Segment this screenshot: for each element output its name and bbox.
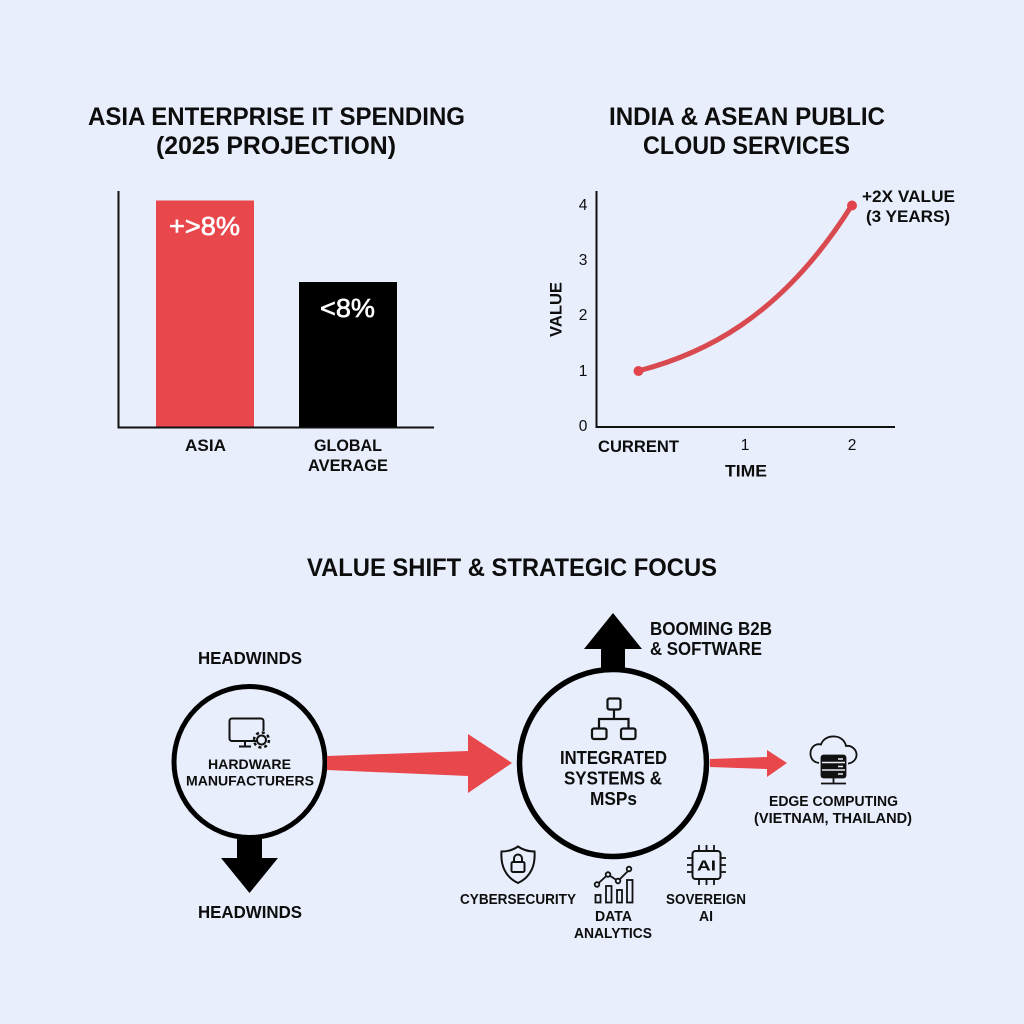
label: edge computing [754,794,912,827]
label: global average: GLOBAL [314,436,382,455]
label: data analytics [574,909,652,942]
bar: global average [299,282,397,427]
callout: 2x value: (3 YEARS) [866,207,950,226]
bar chart: Asia vs global average [118,191,434,475]
y axis ticks: 1 [579,363,587,380]
heading: India and ASEAN public cloud services: INDIA & ASEAN PUBLIC [609,103,885,131]
heading: Asia enterprise IT spending: ASIA ENTERPRISE IT SPENDING [88,103,465,131]
label: headwinds bottom: HEADWINDS [198,902,302,922]
y axis ticks: 3 [579,252,587,269]
label: booming B2B and software [650,619,772,659]
x axis ticks: 2 [848,437,856,454]
label: hardware manufacturers: MANUFACTURERS [186,772,314,788]
heading: value shift and strategic focus: VALUE SHIFT & STRATEGIC FOCUS [307,554,717,582]
label: data analytics: ANALYTICS [574,926,652,942]
y axis ticks: 0 [579,418,588,435]
heading: India and ASEAN public cloud services: CLOUD SERVICES [643,132,850,160]
label: edge computing: (VIETNAM, THAILAND) [754,811,912,827]
icon: AI chip [687,845,726,885]
label: sovereign AI [666,892,746,925]
label: hardware manufacturers [186,756,314,788]
label: global average: AVERAGE [308,456,388,475]
line chart axes [596,191,895,427]
label: cybersecurity: CYBERSECURITY [460,892,576,908]
label: global average [308,436,388,475]
arrow: to edge computing [710,750,787,777]
growth curve [634,200,857,376]
heading: Asia enterprise IT spending [88,103,465,160]
bar: global average: <8% [320,293,375,323]
node: hardware manufacturers [174,686,325,838]
callout: 2x value: +2X VALUE [862,187,955,206]
x axis ticks [741,437,856,454]
x axis title: TIME [725,462,767,480]
bar: Asia [156,200,254,426]
y axis ticks [579,197,588,435]
label: integrated systems and MSPs: MSPs [590,789,637,809]
node: integrated systems and MSPs [520,670,706,856]
bar: Asia: +>8% [169,211,240,241]
arrow: booming up [584,613,642,672]
x tick: current: CURRENT [598,437,680,456]
x axis ticks: 1 [741,437,749,454]
heading: India and ASEAN public cloud services [609,103,885,160]
label: edge computing: EDGE COMPUTING [769,794,898,810]
icon: monitor with gear [230,718,269,748]
icon: shield with lock [501,846,535,883]
icon: cloud server [810,736,857,784]
label: hardware manufacturers: HARDWARE [208,756,291,772]
arrow: value shift to integrated systems [327,734,512,793]
label: Asia: ASIA [185,436,226,455]
y axis ticks: 2 [579,307,587,324]
y axis ticks: 4 [579,197,588,214]
label: sovereign AI: AI [699,909,713,925]
label: headwinds top: HEADWINDS [198,648,302,668]
y axis title: VALUE [546,282,566,337]
label: data analytics: DATA [595,909,633,925]
icon: hierarchy [592,698,636,739]
line chart: public cloud value over time [546,187,955,480]
label: integrated systems and MSPs [560,748,667,809]
callout: 2x value [862,187,955,226]
heading: Asia enterprise IT spending: (2025 PROJECTION) [156,132,396,160]
label: integrated systems and MSPs: INTEGRATED [560,748,667,768]
label: booming B2B and software: & SOFTWARE [650,639,762,659]
arrow: headwinds down [221,834,278,893]
icon: data analytics [595,867,632,902]
icon: AI chip: AI [697,858,716,874]
label: integrated systems and MSPs: SYSTEMS & [564,768,662,788]
bar chart axes [118,191,434,428]
label: booming B2B and software: BOOMING B2B [650,619,772,639]
label: sovereign AI: SOVEREIGN [666,892,746,908]
